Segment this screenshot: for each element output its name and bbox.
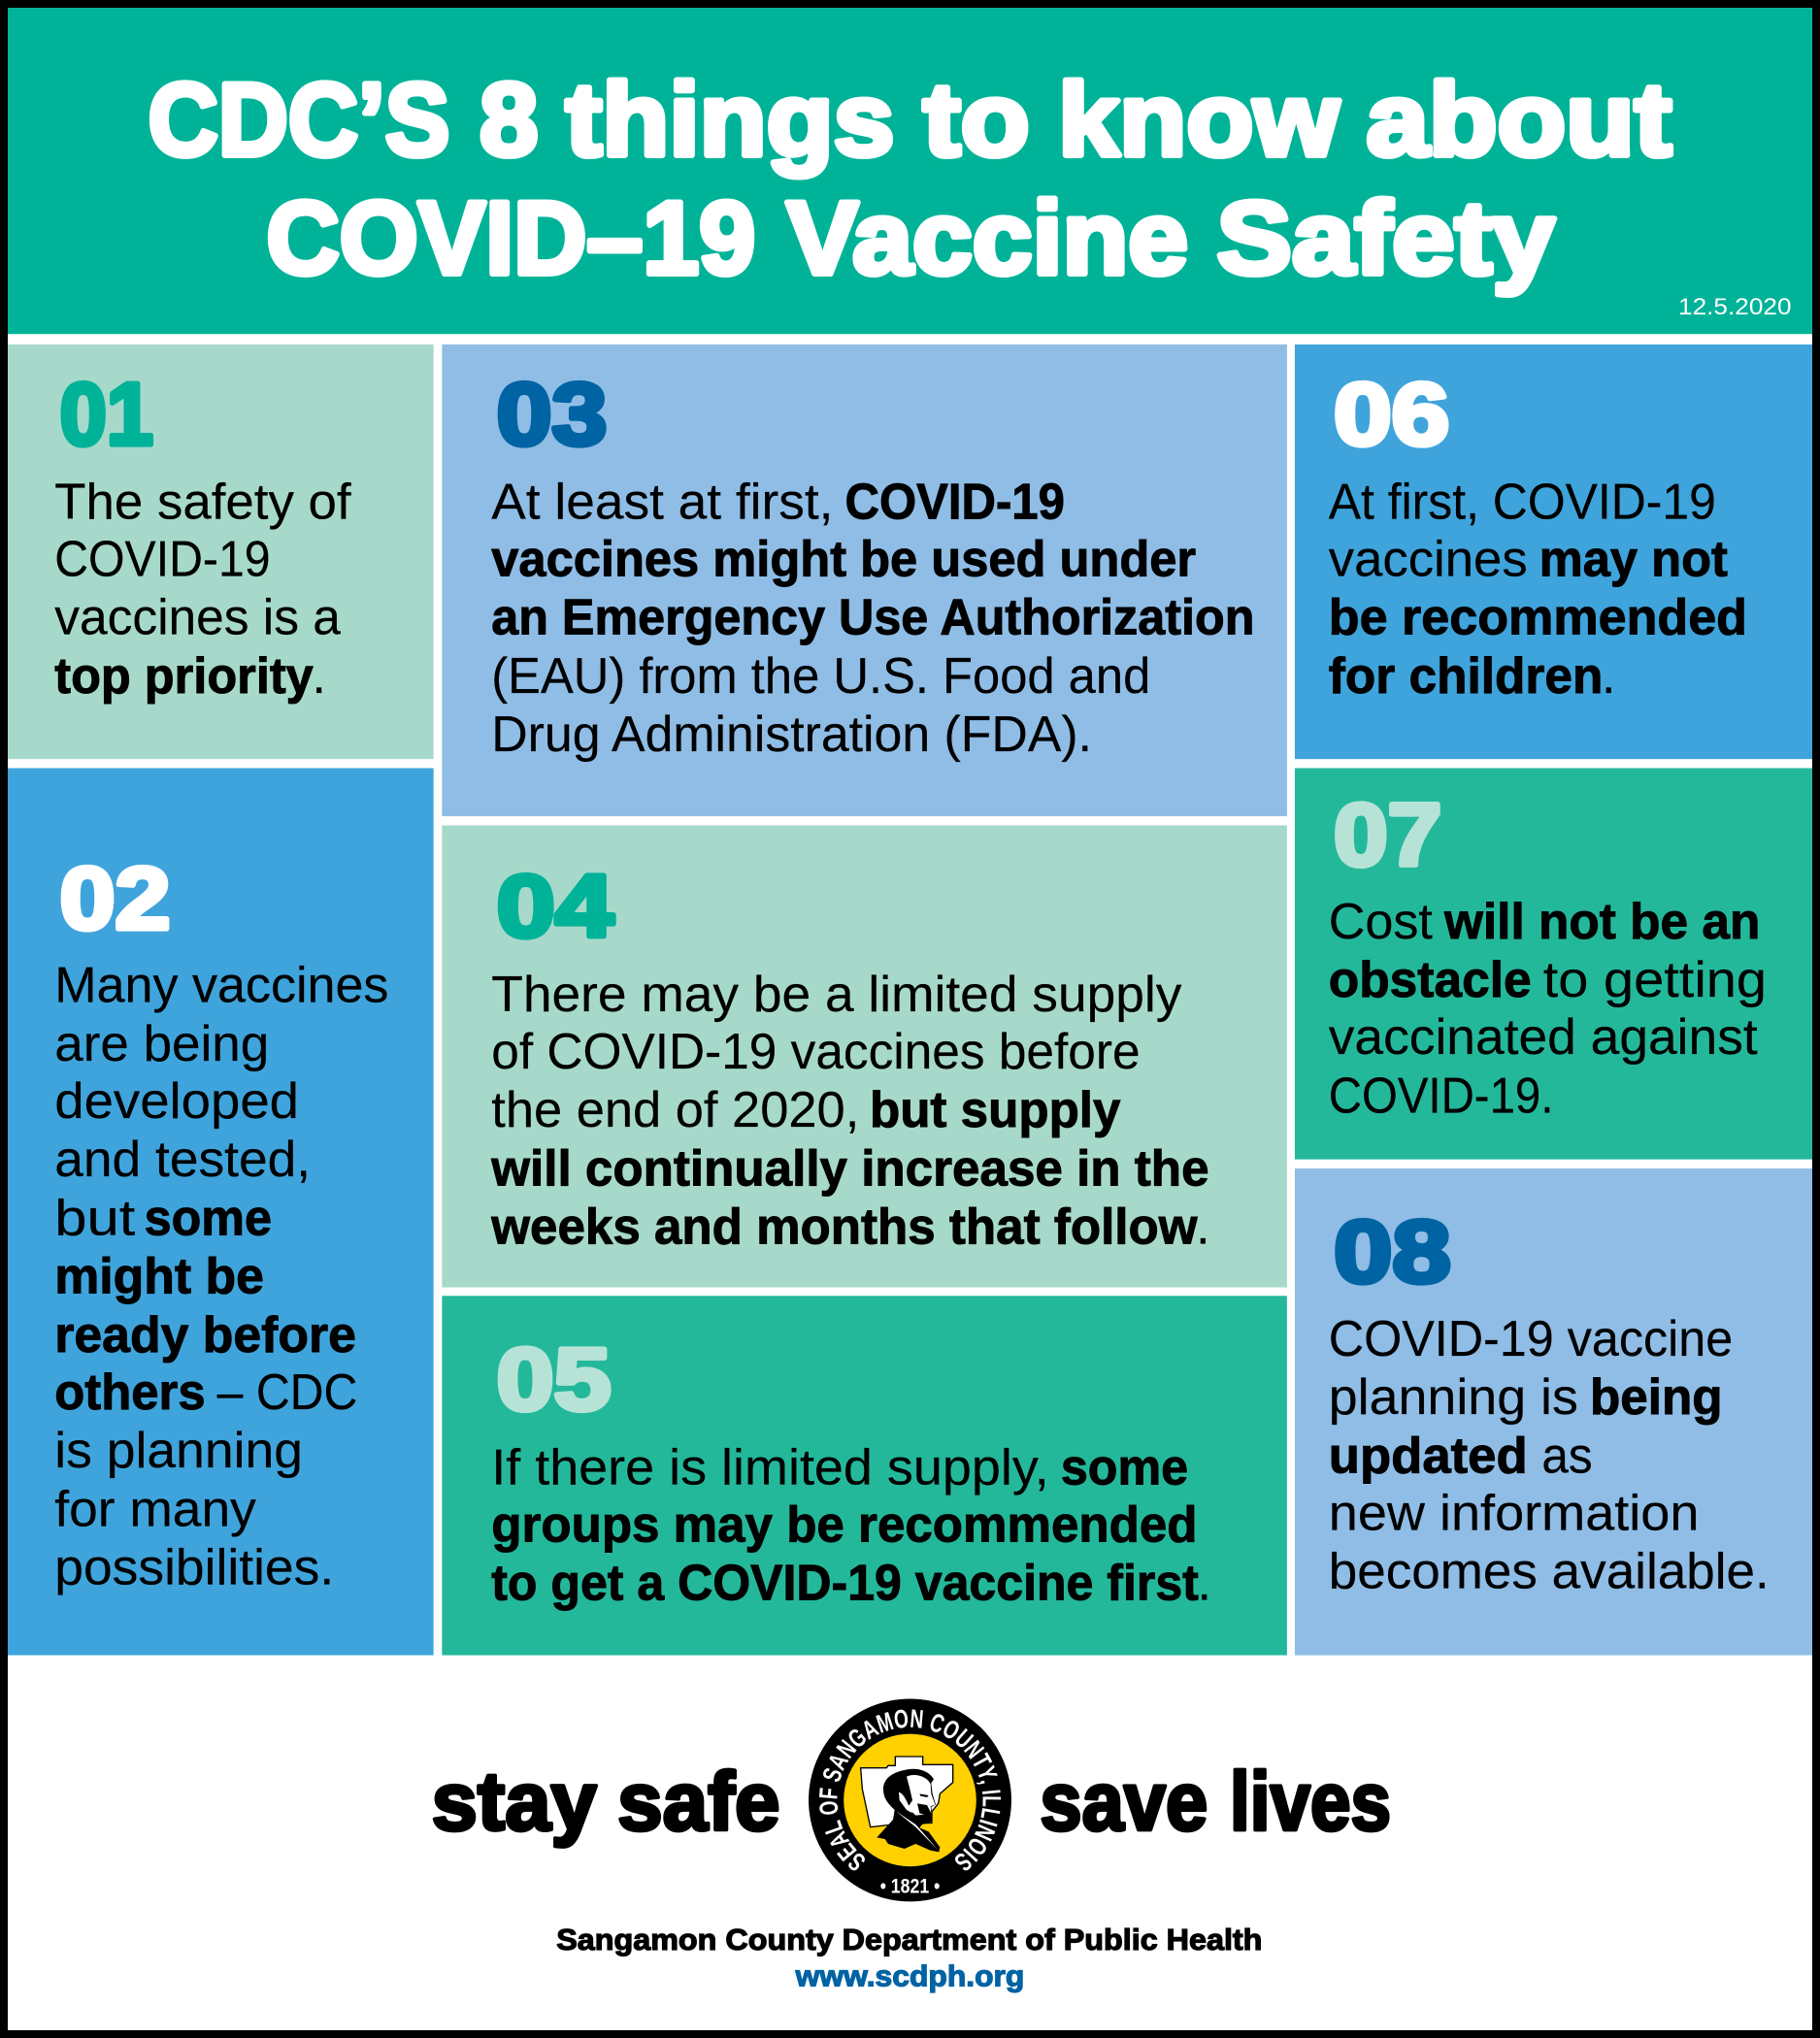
panel: 04	[442, 825, 1287, 1288]
title: CDC’S	[149, 61, 449, 178]
text 07: COVID-19.	[1329, 1068, 1553, 1124]
panel: 02	[8, 769, 434, 1656]
slogan: stay safe: safe	[617, 1756, 780, 1849]
text 08	[1329, 1311, 1770, 1600]
text 02	[54, 958, 388, 1596]
slogan: stay safe: stay	[432, 1756, 597, 1849]
title: things	[566, 61, 894, 178]
title: Safety	[1217, 180, 1555, 296]
slogan: save lives: lives	[1230, 1756, 1391, 1849]
number 05: 05	[497, 1331, 611, 1429]
slogan: save lives	[1040, 1756, 1391, 1849]
text 02: developed	[54, 1073, 299, 1130]
number 08: 08	[1334, 1203, 1451, 1301]
text 03	[491, 474, 1254, 763]
text 01: The safety of	[54, 474, 351, 530]
text 02: ready before	[54, 1307, 356, 1364]
date: 12.5.2020	[1678, 294, 1792, 320]
text 06	[1329, 474, 1747, 705]
number 07: 07	[1334, 786, 1441, 884]
text 02: possibilities.	[54, 1540, 334, 1596]
text 01	[54, 474, 351, 705]
text 02: some	[145, 1190, 272, 1246]
title: about	[1367, 61, 1671, 178]
text 07: to getting	[1543, 952, 1767, 1008]
text 06: At first, COVID-19	[1329, 474, 1716, 530]
text 04: will continually increase in the	[490, 1140, 1209, 1197]
text 05: groups may be recommended	[491, 1496, 1197, 1553]
text 02: and tested,	[54, 1132, 311, 1188]
title: know	[1058, 61, 1340, 178]
text 01: COVID-19	[54, 531, 271, 587]
title: COVID–19	[267, 180, 755, 296]
seal ring text: SEAL OF SANGAMON COUNTY, ILLINOIS	[819, 1709, 1002, 1871]
text 06: .	[1602, 648, 1616, 705]
text 07: Cost	[1329, 894, 1433, 950]
slogan: stay safe	[432, 1756, 780, 1849]
number 06: 06	[1334, 366, 1449, 464]
text 08: becomes available.	[1329, 1544, 1770, 1600]
number 02: 02	[60, 850, 170, 948]
panel: 06	[1295, 345, 1812, 759]
department name: Sangamon County Department of Public Health	[556, 1923, 1262, 1956]
text 07	[1329, 894, 1767, 1124]
text 06: vaccines	[1329, 531, 1528, 587]
text 02: might be	[54, 1249, 264, 1305]
text 03: (EAU) from the U.S. Food and	[491, 648, 1150, 705]
text 07: obstacle	[1329, 952, 1532, 1008]
text 03: vaccines might be used under	[491, 531, 1196, 587]
seal ring text: • 1821 •	[880, 1875, 940, 1898]
header banner	[8, 8, 1812, 334]
text 04: .	[1196, 1200, 1210, 1256]
text 02: is planning	[54, 1423, 303, 1479]
text 02: are being	[54, 1016, 269, 1072]
text 03: COVID-19	[845, 474, 1065, 530]
panel: 01	[8, 345, 434, 759]
text 05: some	[1061, 1439, 1188, 1496]
number 03: 03	[497, 366, 607, 464]
panel: 03	[442, 345, 1287, 816]
text 05	[491, 1439, 1211, 1612]
text 07: vaccinated against	[1329, 1009, 1758, 1066]
text 06: be recommended	[1329, 590, 1747, 646]
text 01: .	[312, 648, 326, 705]
text 08: being	[1590, 1369, 1723, 1426]
text 02: others	[54, 1364, 206, 1421]
text 04: There may be a limited supply	[491, 967, 1181, 1023]
panel: 05	[442, 1296, 1287, 1656]
website: www.scdph.org	[795, 1958, 1024, 1992]
text 06: may not	[1539, 531, 1728, 587]
text 07: will not be an	[1443, 894, 1760, 950]
text 03: an Emergency Use Authorization	[491, 590, 1254, 646]
text 03: At least at first,	[491, 474, 833, 530]
text 05: If there is limited supply,	[491, 1439, 1049, 1496]
text 03: Drug Administration (FDA).	[491, 707, 1092, 763]
number 04: 04	[497, 858, 614, 956]
slogan: save lives: save	[1040, 1756, 1208, 1849]
text 08: as	[1541, 1428, 1593, 1484]
number 01: 01	[60, 366, 153, 464]
text 01: top priority	[54, 648, 314, 705]
text 02: for many	[54, 1481, 256, 1537]
icon: county seal	[809, 1698, 1011, 1902]
title: Vaccine	[786, 180, 1188, 296]
title: 8	[480, 61, 538, 178]
panel: 07	[1295, 769, 1812, 1160]
panel: 08	[1295, 1168, 1812, 1656]
text 05: .	[1197, 1556, 1211, 1612]
text 02: but	[54, 1190, 136, 1246]
text 02: – CDC	[217, 1364, 357, 1421]
text 04: of COVID-19 vaccines before	[491, 1024, 1141, 1080]
text 04: weeks and months that follow	[490, 1200, 1198, 1256]
text 08: planning is	[1329, 1369, 1578, 1426]
text 08: COVID-19 vaccine	[1329, 1311, 1733, 1367]
text 08: updated	[1329, 1428, 1528, 1484]
text 06: for children	[1329, 648, 1603, 705]
title: to	[923, 61, 1030, 178]
title	[149, 61, 1671, 296]
text 04: but supply	[870, 1082, 1120, 1138]
text 05: to get a COVID-19 vaccine first	[491, 1556, 1199, 1612]
text 04	[490, 967, 1210, 1256]
text 04: the end of 2020,	[491, 1082, 859, 1138]
text 01: vaccines is a	[54, 590, 342, 646]
county map and Lincoln portrait	[861, 1757, 953, 1852]
text 02: Many vaccines	[54, 958, 388, 1014]
text 08: new information	[1329, 1485, 1699, 1541]
